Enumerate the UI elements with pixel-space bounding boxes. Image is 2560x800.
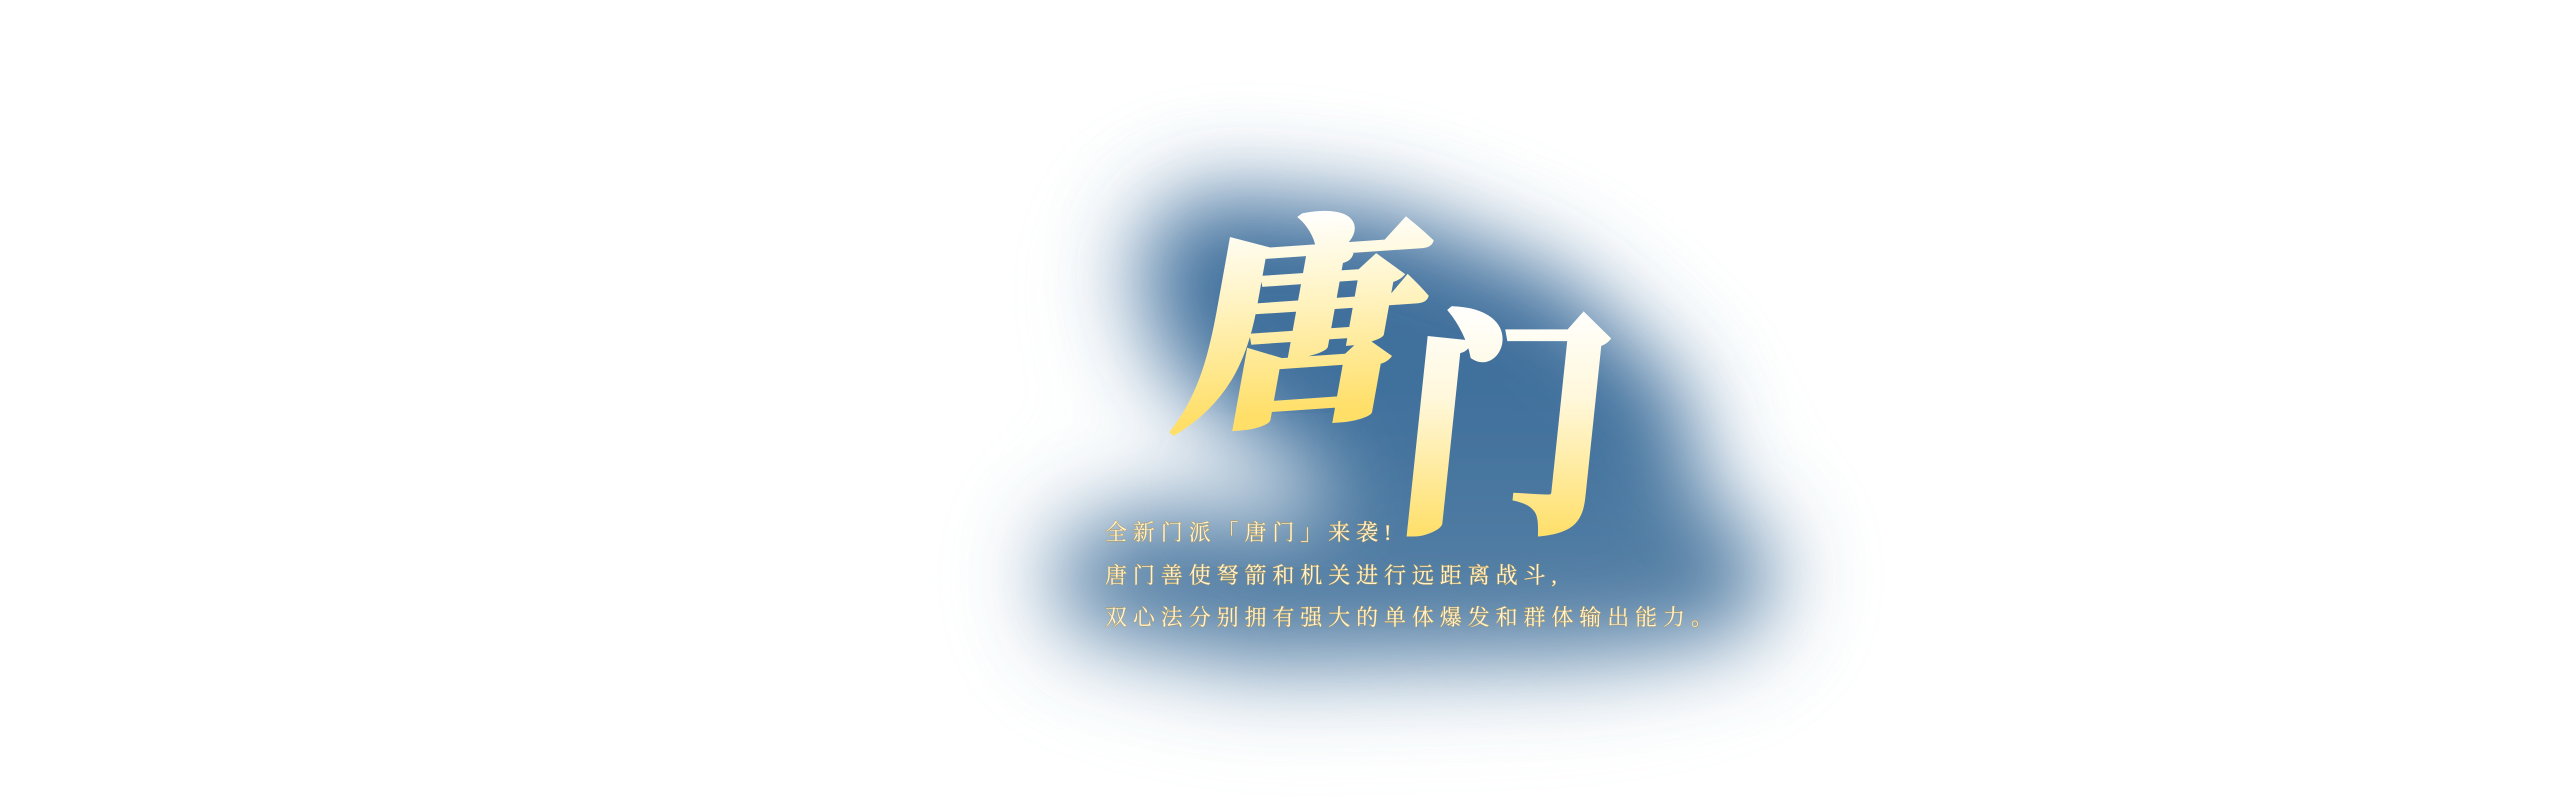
intro line 2: 唐门善使弩箭和机关进行远距离战斗, — [1105, 563, 1563, 588]
intro line 1: 全新门派「唐门」来袭! — [1105, 520, 1397, 545]
intro text — [1105, 520, 1719, 630]
title character: 唐: 唐 — [1161, 142, 1456, 476]
intro line 3: 双心法分别拥有强大的单体爆发和群体输出能力。 — [1105, 605, 1719, 630]
title character: 门: 门 — [1385, 240, 1629, 581]
title: 唐门 — [1161, 142, 1629, 581]
background glow — [1040, 190, 1790, 682]
